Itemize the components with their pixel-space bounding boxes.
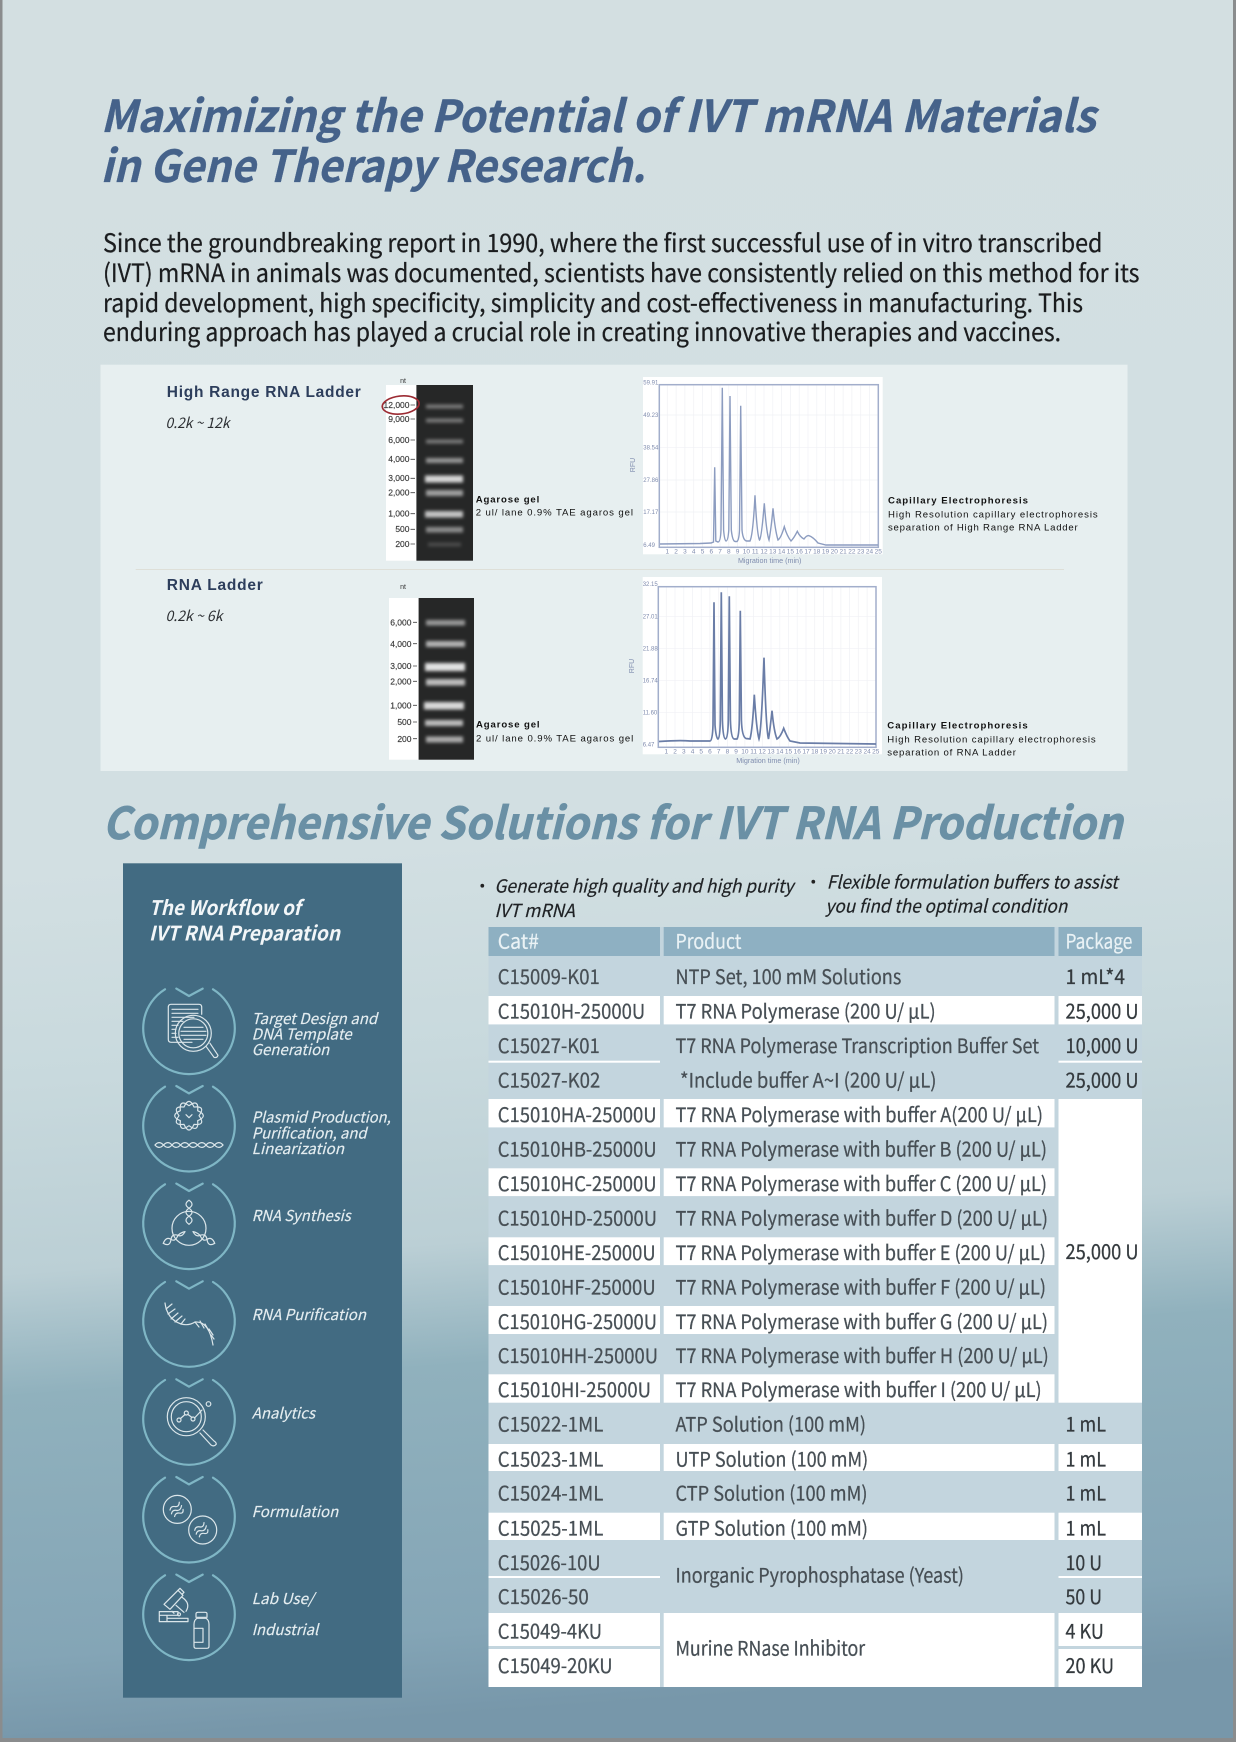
chart: high range capillary electropherogram: 22: [848, 548, 856, 555]
row: buffer G: C15010HG-25000U: [498, 1306, 657, 1335]
step text: target design: DNA Template: [252, 1023, 353, 1044]
product table: [488, 925, 1142, 1687]
caption: capillary electrophoresis, RNA ladder: separation of RNA Ladder: [887, 748, 1017, 759]
bullet: flexible buffers: [812, 868, 1120, 919]
row: T7 polymerase: 25,000 U: [1066, 995, 1139, 1024]
chart: high range capillary electropherogram: 24: [866, 548, 873, 555]
caption: capillary electrophoresis, RNA ladder: High Resolution capillary electrophoresis: [887, 735, 1096, 746]
chart: high range capillary electropherogram: 8: [727, 548, 731, 555]
gel image: high range ladder: 4,000: [388, 454, 410, 464]
chart: high range capillary electropherogram: 7: [718, 548, 722, 555]
step text: analytics: Analytics: [252, 1402, 317, 1423]
row: GTP: [498, 1512, 1106, 1541]
row: buffer C: T7 RNA Polymerase with buffer C (200 U/ µL): [676, 1168, 1047, 1197]
row: UTP: 1 mL: [1066, 1443, 1106, 1472]
title: in Gene Therapy Research.: [100, 131, 646, 195]
chart: high range capillary electropherogram: 59.91: [643, 380, 659, 386]
row group: murine RNase inhibitor: 20 KU: [1066, 1650, 1114, 1679]
gel image: RNA ladder: [389, 584, 474, 760]
row: UTP: [498, 1443, 1106, 1472]
chart: RNA ladder capillary electropherogram: 21: [837, 748, 845, 755]
panel: workflow sidebar: [123, 863, 402, 1698]
step text: plasmid production: Plasmid Production,: [252, 1107, 391, 1128]
title: Maximizing the Potential of IVT mRNA Materials: [100, 81, 1100, 145]
step text: target design: [252, 1008, 379, 1060]
chart: RNA ladder capillary electropherogram: 7: [717, 748, 721, 755]
intro paragraph: (IVT) mRNA in animals was documented, scientists have consistently relied on this method for its: [103, 254, 1140, 290]
step icon: analytics: [143, 1379, 235, 1465]
chart: RNA ladder capillary electropherogram: 32.15: [643, 582, 658, 588]
size range: 0.2k to 12k: 0.2k ~ 12k: [166, 412, 231, 433]
caption: agarose gel, high range: Agarose gel: [476, 495, 539, 506]
chart: RNA ladder capillary electropherogram: 13: [767, 748, 775, 755]
row: buffer F: C15010HF-25000U: [498, 1271, 656, 1300]
chart: RNA ladder capillary electropherogram: 3: [682, 748, 686, 755]
table white cells: [488, 996, 1142, 1687]
step text: RNA synthesis: RNA Synthesis: [252, 1205, 353, 1226]
row: ATP: 1 mL: [1066, 1409, 1106, 1438]
step icon: formulation: [143, 1477, 235, 1563]
gel image: high range ladder: 12,000: [384, 400, 410, 410]
gel image: RNA ladder: 3,000: [390, 661, 412, 671]
row: transcription buffer set K02: *Include buffer A~I (200 U/ µL): [680, 1064, 936, 1093]
row group: murine RNase inhibitor: [498, 1615, 1114, 1679]
table header: Package: [1066, 925, 1132, 954]
chart: RNA ladder capillary electropherogram: 2: [673, 748, 677, 755]
gel image: high range ladder: [384, 378, 473, 561]
step icon: plasmid production: [143, 1086, 235, 1172]
row group: inorganic pyrophosphatase: C15026-50: [498, 1581, 589, 1610]
chart: high range capillary electropherogram: Migration time (min): [738, 556, 801, 565]
chart: RNA ladder capillary electropherogram: 16.74: [643, 679, 658, 685]
row: buffer E, merged package: T7 RNA Polymerase with buffer E (200 U/ µL): [676, 1237, 1046, 1266]
chart: RNA ladder capillary electropherogram: 11.60: [643, 711, 658, 717]
gel image: high range ladder: nt: [400, 378, 406, 385]
row: buffer H: T7 RNA Polymerase with buffer H (200 U/ µL): [676, 1340, 1049, 1369]
chart: RNA ladder capillary electropherogram: 12: [759, 748, 766, 755]
chart: RNA ladder capillary electropherogram: 5: [699, 748, 703, 755]
chart: high range capillary electropherogram: 27.86: [643, 478, 659, 484]
heading: High Range RNA Ladder: High Range RNA Ladder: [167, 384, 361, 401]
row: transcription buffer set K01: C15027-K01: [498, 1030, 600, 1059]
caption: capillary electrophoresis, high range: separation of High Range RNA Ladder: [888, 523, 1078, 534]
row: buffer B: T7 RNA Polymerase with buffer B (200 U/ µL): [676, 1133, 1047, 1162]
row group: murine RNase inhibitor: 4 KU: [1066, 1615, 1104, 1644]
row: NTP set: NTP Set, 100 mM Solutions: [676, 961, 901, 990]
row: T7 polymerase: C15010H-25000U: [498, 995, 645, 1024]
chart: RNA ladder capillary electropherogram: 6: [708, 748, 712, 755]
caption: capillary electrophoresis, high range: Capillary Electrophoresis: [888, 495, 1028, 506]
row: GTP: GTP Solution (100 mM): [676, 1512, 868, 1541]
row: buffer E, merged package: [498, 1236, 1139, 1266]
caption: agarose gel, RNA ladder: Agarose gel: [476, 720, 540, 731]
caption: agarose gel, high range: [476, 495, 633, 519]
table header: [488, 925, 1142, 956]
red circle around 12,000 mark: [381, 394, 420, 416]
row: buffer H: C15010HH-25000U: [498, 1340, 658, 1369]
chart: high range capillary electropherogram: 14: [778, 548, 786, 555]
row: NTP set: C15009-K01: [498, 961, 600, 990]
row: CTP: [498, 1478, 1106, 1507]
row: CTP: 1 mL: [1066, 1478, 1106, 1507]
chart: RNA ladder capillary electropherogram: Migration time (min): [736, 756, 800, 765]
row group: inorganic pyrophosphatase: Inorganic Pyrophosphatase (Yeast): [676, 1559, 964, 1588]
row: UTP: UTP Solution (100 mM): [676, 1443, 868, 1472]
row: NTP set: 1 mL*4: [1066, 961, 1125, 990]
step icon: RNA synthesis: [143, 1184, 235, 1269]
chart: high range capillary electropherogram: 18: [813, 548, 821, 555]
step icon: target design: [143, 989, 235, 1074]
chart: RNA ladder capillary electropherogram: 22: [846, 748, 854, 755]
chart: high range capillary electropherogram: 9: [736, 548, 740, 555]
chart: high range capillary electropherogram: 1: [665, 548, 669, 555]
chart: high range capillary electropherogram: 13: [769, 548, 777, 555]
bullet: high quality: IVT mRNA: [494, 897, 575, 923]
table header: Cat#: [498, 925, 539, 954]
sidebar background: [123, 863, 402, 1698]
gel image: high range ladder: 2,000: [388, 488, 410, 498]
chart: RNA ladder capillary electropherogram: 4: [691, 748, 695, 755]
row group: inorganic pyrophosphatase: [498, 1547, 1102, 1610]
row: transcription buffer set K02: 25,000 U: [1066, 1064, 1139, 1093]
chart: high range capillary electropherogram: 21: [839, 548, 847, 555]
row: buffer D: T7 RNA Polymerase with buffer D (200 U/ µL): [676, 1202, 1048, 1231]
gel image: high range ladder: 500: [395, 524, 410, 534]
gel image: high range ladder: 1,000: [388, 508, 410, 518]
row group: inorganic pyrophosphatase: 10 U: [1066, 1547, 1102, 1576]
row: transcription buffer set K01: 10,000 U: [1066, 1030, 1139, 1059]
row: buffer B: C15010HB-25000U: [498, 1133, 657, 1162]
chart: high range capillary electropherogram: 23: [857, 548, 865, 555]
chart: RNA ladder capillary electropherogram: 1: [664, 748, 668, 755]
chart: high range capillary electropherogram: 38.54: [643, 445, 659, 451]
row: buffer A: C15010HA-25000U: [498, 1099, 657, 1128]
row: buffer C: C15010HC-25000U: [498, 1168, 657, 1197]
row group: inorganic pyrophosphatase: C15026-10U: [498, 1547, 601, 1576]
chart: RNA ladder capillary electropherogram: 14: [776, 748, 784, 755]
chart: high range capillary electropherogram: 12: [760, 548, 768, 555]
chart: high range capillary electropherogram: 2: [674, 548, 678, 555]
intro paragraph: rapid development, high specificity, simplicity and cost-effectiveness in manufacturing. This: [103, 284, 1083, 320]
row: CTP: CTP Solution (100 mM): [676, 1478, 868, 1507]
chart: RNA ladder capillary electropherogram: RFU: [629, 659, 636, 673]
row: GTP: 1 mL: [1066, 1512, 1106, 1541]
step text: target design: Target Design and: [252, 1008, 379, 1029]
gel image: RNA ladder: 4,000: [390, 639, 412, 649]
heading: comprehensive solutions: Comprehensive Solutions for IVT RNA Production: [102, 788, 1125, 852]
gel image: RNA ladder: nt: [400, 584, 406, 591]
caption: agarose gel, RNA ladder: 2 ul/ lane 0.9% TAE agaros gel: [476, 734, 633, 745]
sidebar heading: The Workflow of: [149, 892, 306, 921]
row: buffer H: [498, 1340, 1049, 1369]
chart: high range capillary electropherogram: 11: [752, 548, 759, 555]
gel image: RNA ladder: 500: [397, 717, 412, 727]
step text: formulation: Formulation: [252, 1501, 339, 1522]
chart: RNA ladder capillary electropherogram: 6.47: [643, 742, 655, 748]
row: NTP set: [498, 961, 1125, 990]
caption: capillary electrophoresis, high range: [888, 495, 1098, 534]
caption: agarose gel, RNA ladder: [476, 720, 633, 745]
row: buffer F: T7 RNA Polymerase with buffer F (200 U/ µL): [676, 1271, 1046, 1300]
gel image: RNA ladder: 1,000: [390, 700, 412, 710]
gel image: RNA ladder: 200: [397, 734, 412, 744]
row: buffer E, merged package: 25,000 U: [1066, 1236, 1139, 1265]
row: T7 polymerase: [498, 995, 1139, 1024]
chart: RNA ladder capillary electropherogram: 18: [811, 748, 819, 755]
row: transcription buffer set K02: C15027-K02: [498, 1064, 600, 1093]
chart: RNA ladder capillary electropherogram: 25: [872, 748, 880, 755]
bullet: flexible buffers: Flexible formulation buffers to assist: [827, 868, 1120, 894]
chart: high range capillary electropherogram: 15: [787, 548, 794, 555]
step text: plasmid production: Linearization: [252, 1138, 345, 1159]
chart: high range capillary electropherogram: 17: [804, 548, 812, 555]
row group: murine RNase inhibitor: C15049-4KU: [498, 1615, 602, 1644]
row: CTP: C15024-1ML: [498, 1478, 604, 1507]
step icon: lab use: [143, 1575, 235, 1660]
table header: Product: [676, 925, 742, 954]
chart: RNA ladder capillary electropherogram: [629, 577, 882, 765]
row group: murine RNase inhibitor: Murine RNase Inhibitor: [676, 1633, 865, 1662]
caption: capillary electrophoresis, RNA ladder: Capillary Electrophoresis: [887, 720, 1028, 731]
chart: high range capillary electropherogram: 16: [796, 548, 803, 555]
divider between ladders: [136, 569, 1064, 570]
chart: RNA ladder capillary electropherogram: 19: [820, 748, 827, 755]
chart: high range capillary electropherogram: RFU: [630, 458, 637, 472]
chart: RNA ladder capillary electropherogram: 11: [750, 748, 757, 755]
panel: RNA ladder data: [100, 365, 1128, 771]
gel image: RNA ladder: 2,000: [390, 676, 412, 686]
intro paragraph: [103, 224, 1140, 349]
chart: high range capillary electropherogram: 20: [831, 548, 838, 555]
chart: RNA ladder capillary electropherogram: 17: [802, 748, 810, 755]
intro paragraph: Since the groundbreaking report in 1990, where the first successful use of in vitro transcribed: [103, 224, 1102, 260]
row: buffer G: T7 RNA Polymerase with buffer G (200 U/ µL): [676, 1306, 1048, 1335]
row: UTP: C15023-1ML: [498, 1443, 604, 1472]
caption: capillary electrophoresis, high range: High Resolution capillary electrophoresis: [888, 510, 1098, 521]
sidebar heading: [149, 892, 341, 946]
chart: high range capillary electropherogram: 5: [701, 548, 705, 555]
step text: target design: Generation: [252, 1039, 330, 1060]
row: transcription buffer set K02: [498, 1064, 1139, 1093]
chart: RNA ladder capillary electropherogram: 16: [794, 748, 801, 755]
bullet: high quality: Generate high quality and high purity: [494, 872, 796, 898]
size range: 0.2k to 6k: 0.2k ~ 6k: [166, 605, 224, 626]
sidebar heading: IVT RNA Preparation: [149, 917, 341, 946]
chart: RNA ladder capillary electropherogram: 10: [741, 748, 749, 755]
chart: RNA ladder capillary electropherogram: 23: [855, 748, 862, 755]
panel background: [100, 365, 1128, 771]
gel image: high range ladder: 9,000: [388, 414, 410, 424]
chart: high range capillary electropherogram: 6.49: [643, 543, 656, 549]
row: buffer I: [498, 1374, 1042, 1403]
chart: high range capillary electropherogram: 4: [692, 548, 696, 555]
bullet: flexible buffers: you find the optimal condition: [825, 893, 1068, 919]
chart: RNA ladder capillary electropherogram: 9: [734, 748, 738, 755]
chart: high range capillary electropherogram: 49.23: [643, 413, 659, 419]
chart: high range capillary electropherogram: 17.17: [643, 510, 659, 516]
row group: murine RNase inhibitor: C15049-20KU: [498, 1650, 613, 1679]
gel image: high range ladder: 200: [395, 539, 410, 549]
step text: RNA purification: RNA Purification: [252, 1304, 367, 1325]
gel image: high range ladder: 3,000: [388, 473, 410, 483]
chart: RNA ladder capillary electropherogram: 24: [863, 748, 871, 755]
chart: high range capillary electropherogram: 6: [709, 548, 713, 555]
chart: high range capillary electropherogram: 10: [743, 548, 750, 555]
step text: plasmid production: [252, 1107, 391, 1159]
chart: RNA ladder capillary electropherogram: 21.88: [643, 647, 658, 653]
chart: RNA ladder capillary electropherogram: 27.01: [643, 615, 658, 621]
row: ATP: C15022-1ML: [498, 1409, 604, 1438]
row: buffer A: T7 RNA Polymerase with buffer A(200 U/ µL): [676, 1099, 1043, 1128]
chart: RNA ladder capillary electropherogram: 20: [828, 748, 836, 755]
gel image: RNA ladder: 6,000: [390, 618, 412, 628]
row: buffer G: [498, 1306, 1048, 1335]
row: GTP: C15025-1ML: [498, 1512, 604, 1541]
caption: agarose gel, high range: 2 ul/ lane 0.9% TAE agaros gel: [476, 508, 633, 519]
row: buffer D: [498, 1202, 1048, 1231]
step icon: RNA purification: [143, 1281, 235, 1367]
row: buffer I: C15010HI-25000U: [498, 1374, 651, 1403]
chart: high range capillary electropherogram: 25: [875, 548, 882, 555]
row: buffer B: [498, 1133, 1047, 1162]
row: buffer E, merged package: C15010HE-25000U: [498, 1237, 656, 1266]
row: ATP: ATP Solution (100 mM): [676, 1409, 866, 1438]
table base band: [488, 927, 1142, 1687]
row: ATP: [498, 1409, 1106, 1438]
chart: high range capillary electropherogram: [630, 377, 883, 565]
row: T7 polymerase: T7 RNA Polymerase (200 U/ µL): [676, 995, 936, 1024]
chart: RNA ladder capillary electropherogram: 15: [785, 748, 792, 755]
caption: capillary electrophoresis, RNA ladder: [887, 720, 1096, 759]
gel image: high range ladder: 6,000: [388, 435, 410, 445]
title: [100, 81, 1100, 195]
row: buffer D: C15010HD-25000U: [498, 1202, 657, 1231]
row: buffer C: [498, 1168, 1047, 1197]
heading: RNA Ladder: RNA Ladder: [167, 577, 263, 594]
chart: RNA ladder capillary electropherogram: 8: [726, 748, 730, 755]
row: transcription buffer set K01: T7 RNA Polymerase Transcription Buffer Set: [676, 1030, 1039, 1059]
row group: inorganic pyrophosphatase: 50 U: [1066, 1581, 1102, 1610]
row: buffer F: [498, 1271, 1046, 1300]
chart: high range capillary electropherogram: 19: [822, 548, 829, 555]
step text: lab use: Industrial: [252, 1619, 320, 1640]
row: transcription buffer set K01: [498, 1030, 1139, 1059]
bullet: high quality: [480, 872, 796, 923]
step text: lab use: Lab Use/: [252, 1588, 317, 1609]
step text: lab use: [252, 1588, 320, 1640]
step text: plasmid production: Purification, and: [252, 1122, 368, 1143]
row: buffer A: [498, 1099, 1043, 1128]
intro paragraph: enduring approach has played a crucial role in creating innovative therapies and vaccines.: [103, 313, 1061, 349]
row: buffer I: T7 RNA Polymerase with buffer I (200 U/ µL): [676, 1374, 1042, 1403]
chart: high range capillary electropherogram: 3: [683, 548, 687, 555]
